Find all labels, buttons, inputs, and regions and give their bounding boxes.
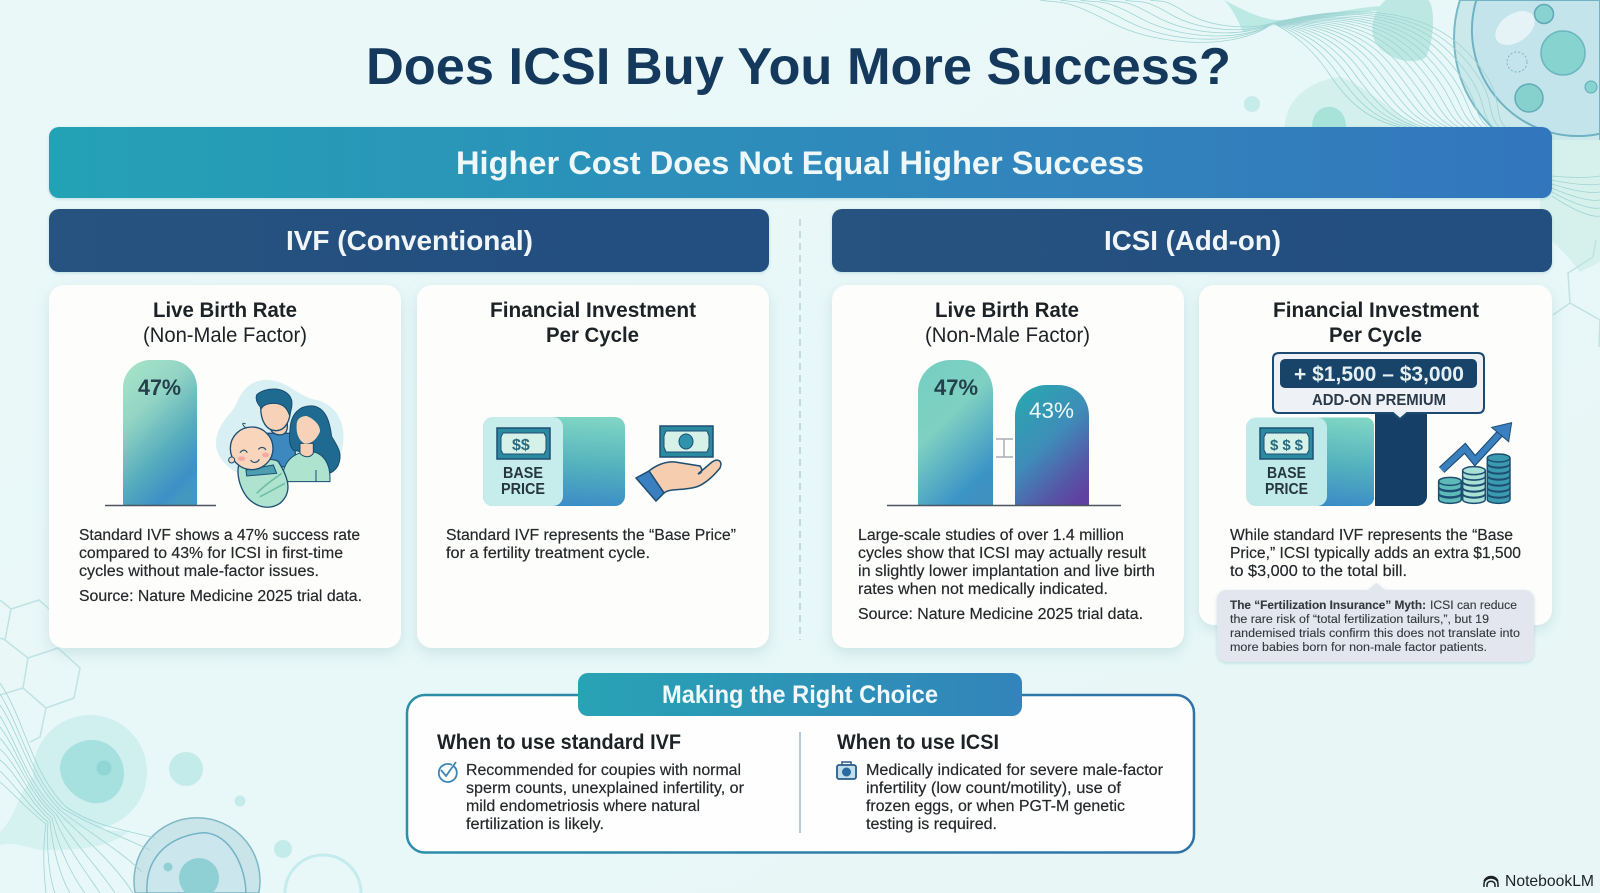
heading: Per Cycle (1329, 323, 1422, 347)
callout: add-on premium: + $1,500 – $3,000 (1294, 363, 1464, 386)
banner: higher cost does not equal higher success (49, 127, 1552, 198)
heading: Per Cycle (546, 323, 639, 347)
callout: fertilization insurance myth: more babies born for non-male factor patients. (1230, 640, 1487, 654)
stacked bar: base price plus add-on: PRICE (1265, 481, 1308, 498)
text block: Standard IVF represents the “Base Price” (446, 527, 736, 544)
heading pill: Making the Right Choice (662, 681, 938, 709)
text block: compared to 43% for ICSI in first-time (79, 545, 343, 562)
icon: dollar bill (497, 428, 550, 459)
bar chart: 47% vs 43%: 43% (1029, 398, 1074, 423)
icon: dollar bill: $$ (512, 437, 530, 454)
text block: cycles show that ICSI may actually result (858, 545, 1147, 562)
icon: hand holding money (636, 426, 721, 501)
column: standard IVF (437, 730, 744, 833)
column: ICSI (837, 730, 1163, 833)
callout: fertilization insurance myth: ICSI can reduce (1430, 598, 1517, 612)
background decoration: bottom left cells and hexagons (0, 600, 361, 893)
callout: add-on premium (1273, 353, 1484, 419)
text block: to $3,000 to the total bill. (1230, 563, 1407, 580)
divider (799, 732, 801, 833)
text block: While standard IVF represents the “Base (1230, 527, 1513, 544)
text block: Price,” ICSI typically adds an extra $1,500 (1230, 545, 1521, 562)
text block (446, 527, 736, 562)
panel: making the right choice (407, 673, 1194, 852)
text block: Recommended for coupies with normal (466, 762, 741, 779)
icon: check (439, 762, 457, 782)
bar: base price (483, 417, 625, 506)
column: standard IVF: When to use standard IVF (437, 730, 681, 754)
text block: mild endometriosis where natural (466, 798, 700, 815)
bar chart: 47% (105, 360, 216, 506)
heading: Live Birth Rate (935, 298, 1079, 322)
text block: in slightly lower implantation and live birth (858, 563, 1155, 580)
text block: Standard IVF shows a 47% success rate (79, 527, 360, 544)
icon: dollar bill (1260, 428, 1313, 459)
callout: fertilization insurance myth: The “Fertilization Insurance” Myth: (1230, 598, 1426, 612)
heading: (Non-Male Factor) (925, 323, 1090, 347)
section header: ICSI: ICSI (Add-on) (1104, 225, 1281, 256)
text block: rates when not medically indicated. (858, 581, 1108, 598)
section header: ICSI (832, 209, 1552, 272)
banner: higher cost does not equal higher success: Higher Cost Does Not Equal Higher Success (456, 145, 1144, 181)
heading: Live Birth Rate (153, 298, 297, 322)
title: Does ICSI Buy You More Success? (366, 38, 1231, 96)
text block (79, 527, 362, 605)
panel: ICSI live birth rate (832, 285, 1184, 648)
heading (490, 298, 696, 347)
logo: NotebookLM: NotebookLM (1505, 873, 1594, 890)
callout: fertilization insurance myth: randemised trials confirm this does not translate into (1230, 626, 1520, 640)
panel: ICSI financial investment (1199, 285, 1552, 625)
text block: cycles without male-factor issues. (79, 563, 319, 580)
text block (866, 762, 1163, 833)
section header: IVF (49, 209, 769, 272)
callout: add-on premium: ADD-ON PREMIUM (1312, 392, 1446, 409)
heading: (Non-Male Factor) (143, 323, 307, 347)
text block: Large-scale studies of over 1.4 million (858, 527, 1124, 544)
icon: coins and rising arrow (1439, 423, 1512, 503)
bar: base price: BASE (503, 465, 543, 482)
bar chart: 47% vs 43%: 47% (934, 375, 978, 400)
section header: IVF: IVF (Conventional) (286, 225, 533, 256)
stacked bar: base price plus add-on (1246, 405, 1427, 506)
heading (143, 298, 307, 347)
heading (1273, 298, 1479, 347)
text block: Medically indicated for severe male-factor (866, 762, 1163, 779)
text block: testing is required. (866, 816, 997, 833)
text block: Source: Nature Medicine 2025 trial data. (858, 606, 1143, 623)
panel: IVF financial investment (417, 285, 769, 648)
icon: medical case (837, 762, 856, 779)
panel: IVF live birth rate (49, 285, 401, 648)
column divider (799, 219, 801, 640)
callout: fertilization insurance myth (1217, 583, 1534, 662)
text block: sperm counts, unexplained infertility, or (466, 780, 744, 797)
bar chart: 47%: 47% (138, 375, 181, 400)
bar chart: 47% vs 43% (887, 360, 1121, 506)
text block: for a fertility treatment cycle. (446, 545, 650, 562)
text block: Source: Nature Medicine 2025 trial data. (79, 588, 362, 605)
heading: Financial Investment (1273, 298, 1479, 322)
text block (858, 527, 1155, 623)
bar: base price: PRICE (501, 481, 545, 498)
text block: infertility (low count/motility), use of (866, 780, 1122, 797)
stacked bar: base price plus add-on: BASE (1267, 465, 1306, 482)
heading pill (578, 673, 1022, 716)
callout: fertilization insurance myth: the rare risk of “total fertilization tailurs,”, but 19 (1230, 612, 1489, 626)
text block: fertilization is likely. (466, 816, 604, 833)
icon: dollar bill: $$$ (1270, 437, 1304, 454)
text block (1230, 527, 1521, 580)
text block: frozen eggs, or when PGT-M genetic (866, 798, 1125, 815)
heading: Financial Investment (490, 298, 696, 322)
column: ICSI: When to use ICSI (837, 730, 999, 754)
icon: family with baby (216, 380, 344, 507)
text block (466, 762, 744, 833)
background decoration: top right cell and waves (1040, 0, 1600, 347)
heading (925, 298, 1090, 347)
